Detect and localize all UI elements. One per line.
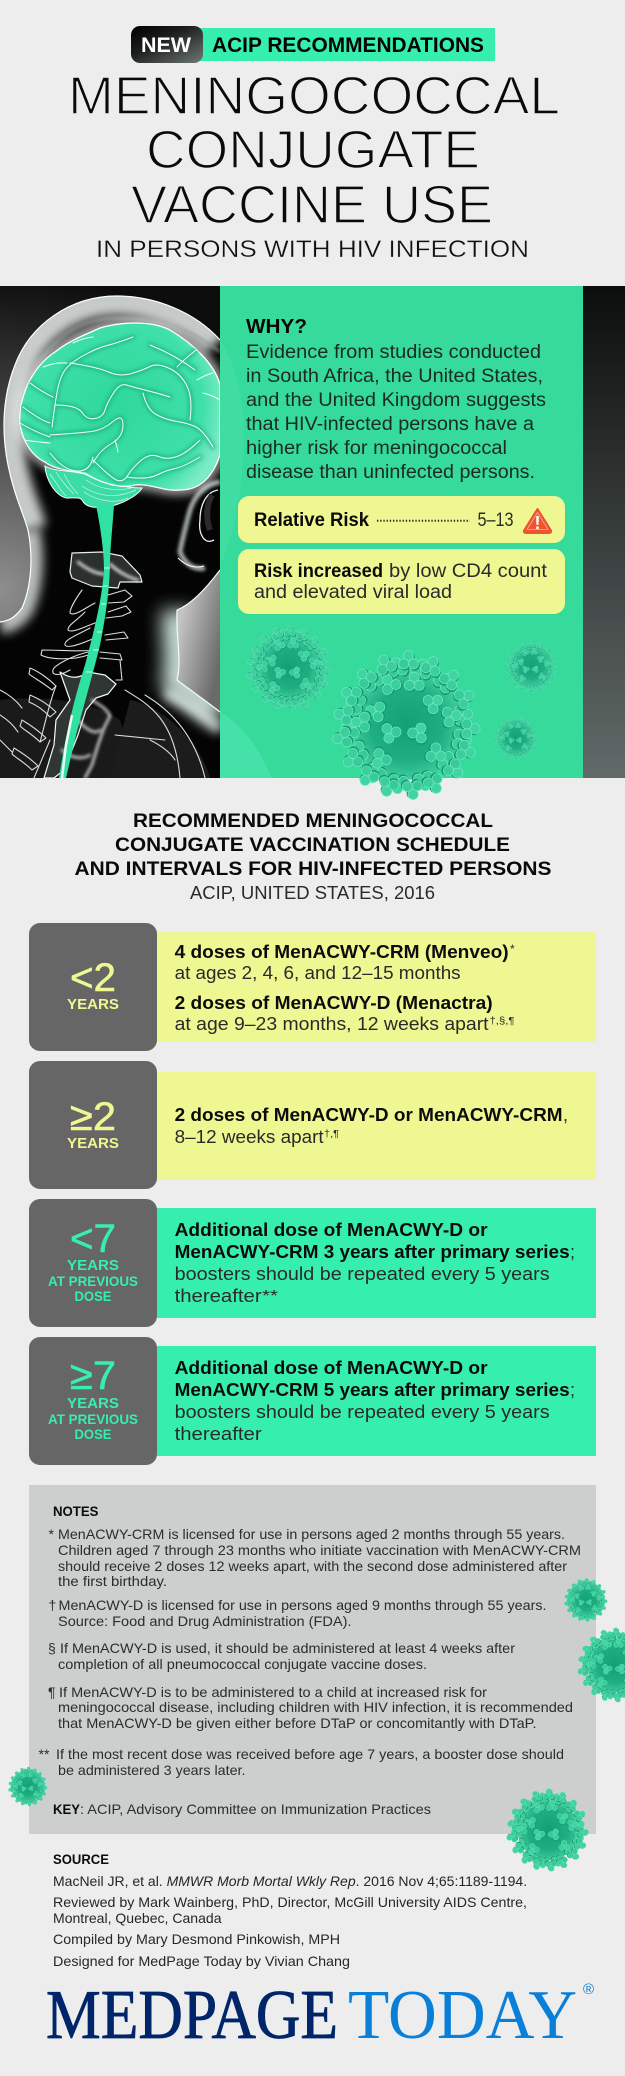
schedule row: under 2 years: 4 doses of MenACWY-CRM (Menveo)	[175, 942, 509, 962]
cerebellum	[45, 466, 142, 507]
schedule row: 7 years or older at previous dose: ≥7	[70, 1354, 116, 1398]
schedule row: under 2 years: at ages 2, 4, 6, and 12–15 months	[175, 963, 461, 983]
schedule row: 7 years or older at previous dose: Additional dose of MenACWY-D or	[175, 1358, 488, 1378]
note: section sign: §	[48, 1640, 56, 1656]
badge: new ACIP recommendations	[131, 26, 495, 63]
schedule row: under 2 years: at age 9–23 months, 12 weeks apart	[175, 1014, 489, 1034]
why body text	[246, 342, 546, 483]
schedule row: under 7 years at previous dose: AT PREVIOUS	[48, 1273, 138, 1289]
title: CONJUGATE	[146, 120, 480, 180]
ear	[178, 482, 220, 568]
note: double asterisk: be administered 3 years later.	[58, 1762, 246, 1778]
schedule row: 2 years or older: †,¶	[324, 1128, 339, 1140]
section heading: vaccination schedule	[74, 810, 552, 880]
schedule row: 2 years or older	[29, 1061, 596, 1189]
note: pilcrow: meningococcal disease, including children with HIV infection, it is recommended	[58, 1699, 573, 1715]
schedule row: under 7 years at previous dose: boosters should be repeated every 5 years	[175, 1264, 550, 1284]
why body text: Evidence from studies conducted	[246, 342, 541, 363]
note: pilcrow: that MenACWY-D be given either before DTaP or concomitantly with DTaP.	[58, 1715, 536, 1731]
callout: risk increased: by low CD4 count	[389, 561, 548, 582]
note: section sign: If MenACWY-D is used, it should be administered at least 4 weeks after	[60, 1640, 515, 1656]
title: VACCINE USE	[131, 175, 493, 235]
note: double asterisk: **	[38, 1746, 50, 1762]
schedule row: under 7 years at previous dose: thereafter	[175, 1286, 262, 1306]
virus: hero left	[246, 626, 331, 711]
note: asterisk: Children aged 7 through 23 months who initiate vaccination with MenACWY-CRM	[58, 1542, 581, 1558]
schedule row: under 7 years at previous dose: **	[262, 1288, 278, 1305]
note: pilcrow: If MenACWY-D is to be administered to a child at increased risk for	[59, 1684, 487, 1700]
schedule row: under 2 years: †,§,¶	[490, 1015, 515, 1027]
illustration: head with glowing brain and spine	[0, 286, 220, 778]
schedule row: under 7 years at previous dose: ;	[570, 1242, 575, 1262]
brain	[20, 323, 220, 507]
panel: why	[220, 286, 583, 778]
virus: hero top right	[505, 641, 557, 693]
schedule row: under 2 years	[29, 923, 596, 1051]
schedule row: under 7 years at previous dose: MenACWY-CRM 3 years after primary series	[175, 1242, 570, 1262]
schedule row: 7 years or older at previous dose: AT PREVIOUS	[48, 1411, 138, 1427]
schedule row: under 2 years: *	[510, 942, 515, 956]
icon: warning triangle: !	[534, 513, 540, 533]
virus: hero large	[331, 650, 480, 800]
source block	[53, 1852, 527, 1969]
panel: notes	[29, 1485, 596, 1834]
schedule row: 7 years or older at previous dose: boosters should be repeated every 5 years	[175, 1402, 550, 1422]
logo: MedPage Today	[46, 1977, 594, 2054]
virus: notes left	[8, 1767, 47, 1806]
why body text: disease than uninfected persons.	[246, 462, 535, 483]
note: asterisk	[48, 1526, 581, 1589]
schedule row: 7 years or older at previous dose: MenACWY-CRM 5 years after primary series	[175, 1380, 570, 1400]
schedule row: under 2 years: 2 doses of MenACWY-D (Menactra)	[175, 993, 493, 1013]
section heading: vaccination schedule: CONJUGATE VACCINATION SCHEDULE	[115, 834, 510, 856]
schedule row: under 7 years at previous dose: <7	[70, 1217, 116, 1261]
key: : ACIP, Advisory Committee on Immunization Practices	[80, 1801, 431, 1817]
why heading: WHY?	[246, 315, 307, 338]
schedule row: 2 years or older: 2 doses of MenACWY-D or MenACWY-CRM	[175, 1105, 563, 1125]
callout: risk increased: and elevated viral load	[254, 582, 452, 603]
source block: MacNeil JR, et al. MMWR Morb Mortal Wkly Rep. 2016 Nov 4;65:1189-1194.	[53, 1873, 527, 1889]
spinal cord	[59, 505, 114, 778]
why body text: and the United Kingdom suggests	[246, 390, 546, 411]
schedule row: under 7 years at previous dose	[29, 1199, 596, 1327]
section heading: vaccination schedule: RECOMMENDED MENINGOCOCCAL	[133, 810, 493, 832]
virus: hero bottom right	[494, 716, 537, 760]
schedule row: 2 years or older: 8–12 weeks apart	[175, 1127, 324, 1147]
schedule row: 2 years or older: ≥2	[70, 1095, 116, 1139]
source block: Designed for MedPage Today by Vivian Chang	[53, 1953, 350, 1969]
callout: relative risk	[238, 496, 565, 543]
note: double asterisk	[38, 1746, 564, 1778]
source block: Montreal, Quebec, Canada	[53, 1910, 222, 1926]
schedule row: 2 years or older: ,	[563, 1105, 568, 1125]
right dark strip	[583, 286, 625, 778]
callout: relative risk: 5–13	[478, 510, 514, 531]
virus: notes bottom right	[506, 1789, 589, 1872]
note: dagger: †	[48, 1597, 56, 1613]
key: KEY	[53, 1801, 81, 1817]
note: pilcrow	[48, 1684, 573, 1731]
badge: new ACIP recommendations: NEW	[141, 34, 191, 57]
icon: warning triangle	[524, 509, 551, 533]
why body text: that HIV-infected persons have a	[246, 414, 534, 435]
schedule row: 7 years or older at previous dose: DOSE	[74, 1426, 112, 1442]
note: asterisk: *	[48, 1526, 54, 1542]
source block: SOURCE	[53, 1852, 109, 1867]
note: double asterisk: If the most recent dose was received before age 7 years, a booster dose should	[56, 1746, 564, 1762]
schedule row: 7 years or older at previous dose	[29, 1337, 596, 1465]
note: section sign	[48, 1640, 515, 1672]
section heading: vaccination schedule: AND INTERVALS FOR HIV-INFECTED PERSONS	[74, 858, 552, 880]
why body text: higher risk for meningococcal	[246, 438, 507, 459]
schedule row: 7 years or older at previous dose: ;	[570, 1380, 575, 1400]
virus: notes right small	[564, 1578, 607, 1622]
schedule row: under 7 years at previous dose: YEARS	[67, 1257, 119, 1274]
schedule row: 7 years or older at previous dose: YEARS	[67, 1395, 119, 1412]
subtitle: IN PERSONS WITH HIV INFECTION	[96, 236, 529, 263]
schedule row: under 2 years: YEARS	[67, 996, 119, 1013]
note: dagger: Source: Food and Drug Administration (FDA).	[58, 1613, 352, 1629]
schedule row: under 2 years: <2	[70, 956, 116, 1000]
head glow	[0, 296, 220, 730]
section subheading: ACIP, UNITED STATES, 2016	[190, 882, 435, 903]
title	[68, 66, 560, 235]
virus: notes right edge	[577, 1628, 625, 1703]
callout: risk increased	[238, 549, 565, 614]
note: section sign: completion of all pneumococcal conjugate vaccine doses.	[58, 1656, 427, 1672]
note: pilcrow: ¶	[48, 1684, 56, 1700]
schedule row: under 7 years at previous dose: Additional dose of MenACWY-D or	[175, 1220, 488, 1240]
schedule row: 2 years or older: YEARS	[67, 1135, 119, 1152]
logo: MedPage Today: ®	[583, 1981, 594, 1998]
badge: new ACIP recommendations: ACIP RECOMMENDATIONS	[212, 34, 484, 57]
callout: risk increased: Risk increased	[254, 561, 383, 582]
note: dagger	[48, 1597, 546, 1629]
note: dagger: MenACWY-D is licensed for use in persons aged 9 months through 55 years.	[58, 1597, 546, 1613]
source block: Compiled by Mary Desmond Pinkowish, MPH	[53, 1931, 340, 1947]
why body text: in South Africa, the United States,	[246, 366, 543, 387]
schedule row: under 7 years at previous dose: DOSE	[74, 1288, 112, 1304]
note: asterisk: the first birthday.	[58, 1573, 167, 1589]
logo: MedPage Today: TODAY	[348, 1977, 577, 2054]
skeleton: vertebrae and ribs	[0, 552, 210, 778]
source block: Reviewed by Mark Wainberg, PhD, Director, McGill University AIDS Centre,	[53, 1894, 527, 1910]
title: MENINGOCOCCAL	[68, 66, 560, 126]
notes heading: NOTES	[53, 1504, 98, 1519]
note: asterisk: MenACWY-CRM is licensed for use in persons aged 2 months through 55 years.	[58, 1526, 565, 1542]
logo: MedPage Today: MEDPAGE	[46, 1977, 338, 2054]
note: asterisk: should receive 2 doses 12 weeks apart, with the second dose administered after	[58, 1558, 567, 1574]
schedule row: 7 years or older at previous dose: thereafter	[175, 1424, 262, 1444]
callout: relative risk: Relative Risk	[254, 510, 369, 531]
